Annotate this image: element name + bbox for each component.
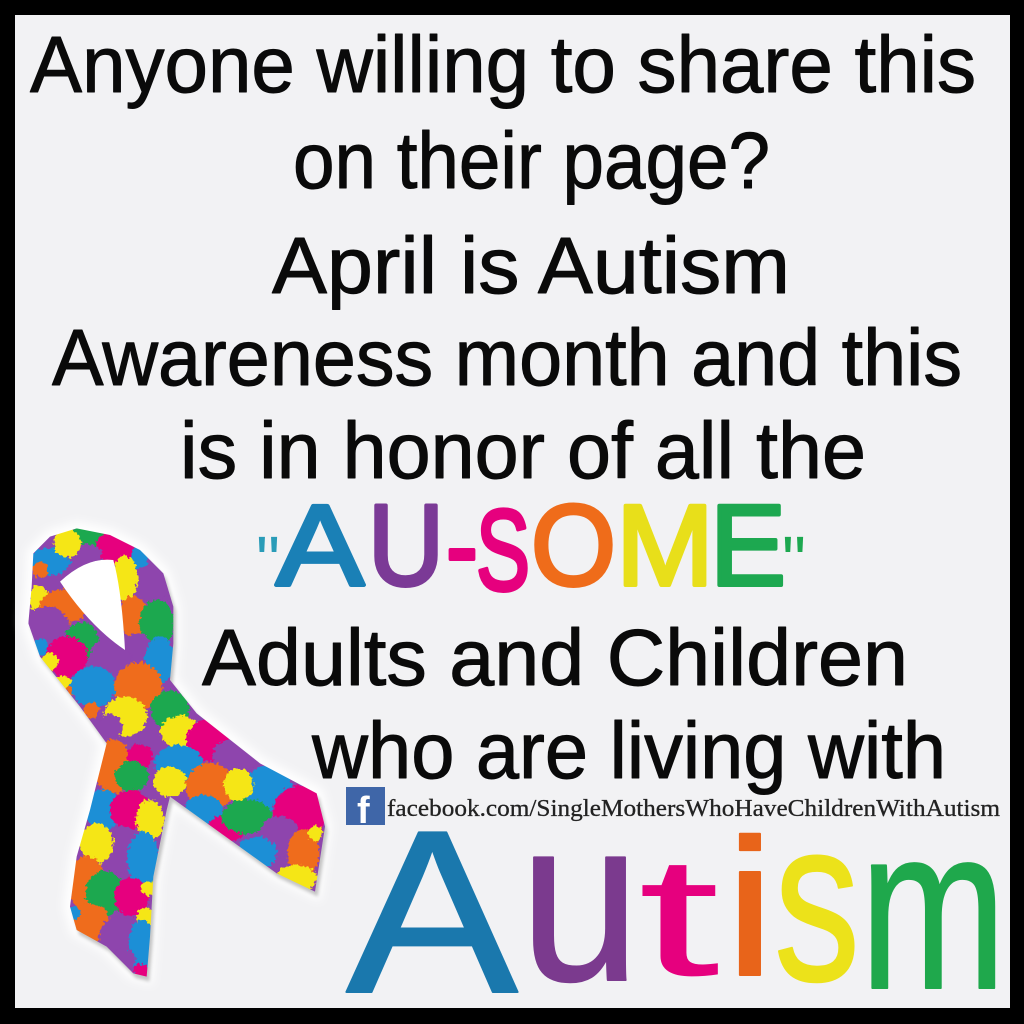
AU-SOME colored word: " — [256, 522, 280, 600]
icon: puzzle awareness ribbon — [14, 524, 328, 982]
AU-SOME colored word: U — [368, 482, 444, 610]
AU-SOME colored word: A — [276, 482, 364, 610]
Autism colored word: u — [520, 771, 640, 1024]
AU-SOME colored word: " — [782, 522, 806, 600]
line 4: Awareness month and this — [52, 313, 962, 402]
Autism colored word: t — [638, 822, 720, 1012]
AU-SOME colored word: O — [531, 482, 616, 610]
line 2: on their page? — [293, 116, 770, 205]
Autism colored word: i — [725, 799, 775, 1017]
AU-SOME colored word: S — [476, 487, 530, 615]
facebook url: facebook.com/SingleMothersWhoHaveChildrenWithAutism — [387, 796, 1000, 822]
AU-SOME colored word — [256, 482, 806, 615]
Autism colored word — [346, 771, 1006, 1024]
line 1: Anyone willing to share this — [30, 20, 976, 109]
icon: facebook logo: f — [357, 790, 370, 832]
icon: facebook logo — [346, 787, 385, 832]
line 5: is in honor of all the — [180, 406, 866, 495]
AU-SOME colored word: - — [446, 482, 478, 610]
AU-SOME colored word: M — [616, 482, 714, 610]
line 7: Adults and Children — [202, 613, 908, 702]
Autism colored word: s — [774, 771, 860, 1024]
heading text — [30, 20, 976, 795]
line 8: who are living with — [311, 706, 946, 795]
AU-SOME colored word: E — [710, 482, 786, 610]
line 3: April is Autism — [272, 221, 790, 310]
